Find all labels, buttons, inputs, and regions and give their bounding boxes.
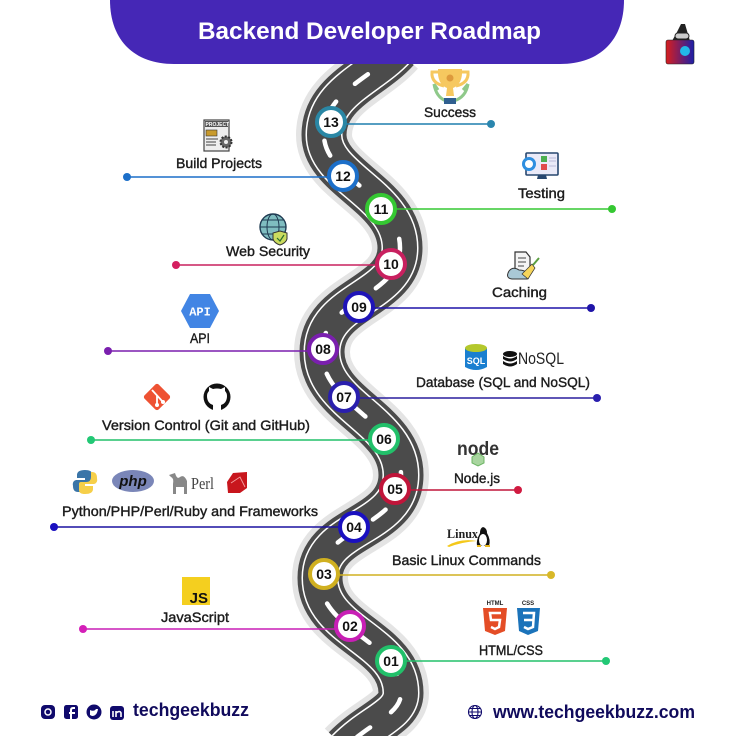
icon: node.js: node [457, 439, 499, 460]
icon: perl camel [169, 473, 214, 494]
badge 12 [329, 162, 357, 190]
step 08 connector [104, 347, 308, 355]
badge 09: 09 [351, 299, 367, 315]
icon: php: php [118, 473, 147, 490]
icon: css3 [517, 601, 540, 635]
step 11 connector [395, 205, 616, 213]
step 10 connector [172, 261, 376, 269]
icon: caching [508, 252, 539, 279]
icon: NoSQL stack: NoSQL [518, 349, 564, 368]
label: Node.js: Node.js [454, 470, 500, 486]
label: Caching: Caching [492, 284, 547, 300]
step 13 connector [345, 120, 495, 128]
icon: git [143, 383, 171, 411]
step 03 connector [338, 571, 555, 579]
step 12 connector [123, 173, 328, 181]
label: Version Control: Version Control (Git and GitHub) [102, 417, 310, 433]
icon: html5 [483, 601, 507, 635]
badge 01: 01 [383, 653, 399, 669]
badge 08: 08 [315, 341, 331, 357]
road [320, 50, 401, 736]
badge 13: 13 [323, 114, 339, 130]
step 05 connector [409, 486, 522, 494]
step 01 connector [405, 657, 610, 665]
label: HTML/CSS: HTML/CSS [479, 642, 543, 658]
badge 10: 10 [383, 256, 399, 272]
icon: project document [204, 120, 232, 151]
badge 09 [345, 293, 373, 321]
label: API: API [190, 330, 210, 346]
label: Build Projects: Build Projects [176, 155, 262, 171]
badge 02 [336, 612, 364, 640]
icon: SQL cylinder [465, 344, 487, 370]
icon: python [73, 470, 97, 494]
icon: linux [447, 526, 490, 547]
icon: hacker logo [666, 24, 694, 64]
label: Web Security: Web Security [226, 243, 310, 259]
icon: php [112, 470, 154, 492]
badge 07: 07 [336, 389, 352, 405]
icon: project document: PROJECT [206, 122, 229, 128]
badge 13 [317, 108, 345, 136]
icon: API hexagon: API [189, 306, 211, 320]
footer handle: techgeekbuzz [133, 700, 249, 720]
badge 06: 06 [376, 431, 392, 447]
icon: javascript [182, 577, 210, 607]
badge 11: 11 [374, 201, 389, 217]
icon: testing monitor [522, 153, 558, 179]
step 02 connector [79, 625, 336, 633]
step 06 connector [87, 436, 370, 444]
step 07 connector [358, 394, 601, 402]
title: Backend Developer Roadmap [198, 18, 541, 45]
badge 04 [340, 513, 368, 541]
icon: perl camel: Perl [191, 474, 214, 493]
icon: web security globe [260, 214, 287, 245]
badge 04: 04 [346, 519, 362, 535]
badge 02: 02 [342, 618, 358, 634]
badge 01 [377, 647, 405, 675]
icon: html5: HTML [487, 601, 504, 607]
label: languages: Python/PHP/Perl/Ruby and Frameworks [62, 503, 318, 519]
badge 07 [330, 383, 358, 411]
icon: SQL cylinder: SQL [467, 356, 486, 366]
badge 12: 12 [335, 168, 351, 184]
badge 05 [381, 475, 409, 503]
icon: NoSQL stack [503, 349, 564, 368]
icon: javascript: JS [190, 590, 208, 607]
social icons [41, 704, 124, 720]
label: Database: Database (SQL and NoSQL) [416, 374, 590, 390]
icon: website globe [468, 706, 482, 718]
badge 10 [377, 250, 405, 278]
badge 11 [367, 195, 395, 223]
icon: linux: Linux [447, 526, 478, 541]
icon: API hexagon [181, 294, 219, 328]
label: Success: Success [424, 104, 476, 120]
badge 05: 05 [387, 481, 403, 497]
icon: css3: CSS [522, 601, 534, 607]
label: JavaScript: JavaScript [161, 609, 229, 625]
step 04 connector [50, 523, 340, 531]
icon: trophy [432, 69, 468, 104]
badge 03: 03 [316, 566, 332, 582]
badge 03 [310, 560, 338, 588]
icon: ruby [227, 472, 247, 493]
badge 06 [370, 425, 398, 453]
icon: github [204, 384, 230, 411]
label: Testing: Testing [518, 185, 565, 201]
footer website: www.techgeekbuzz.com [492, 702, 695, 722]
header banner [110, 0, 624, 64]
badge 08 [309, 335, 337, 363]
label: Linux: Basic Linux Commands [392, 552, 541, 568]
step 09 connector [374, 304, 595, 312]
